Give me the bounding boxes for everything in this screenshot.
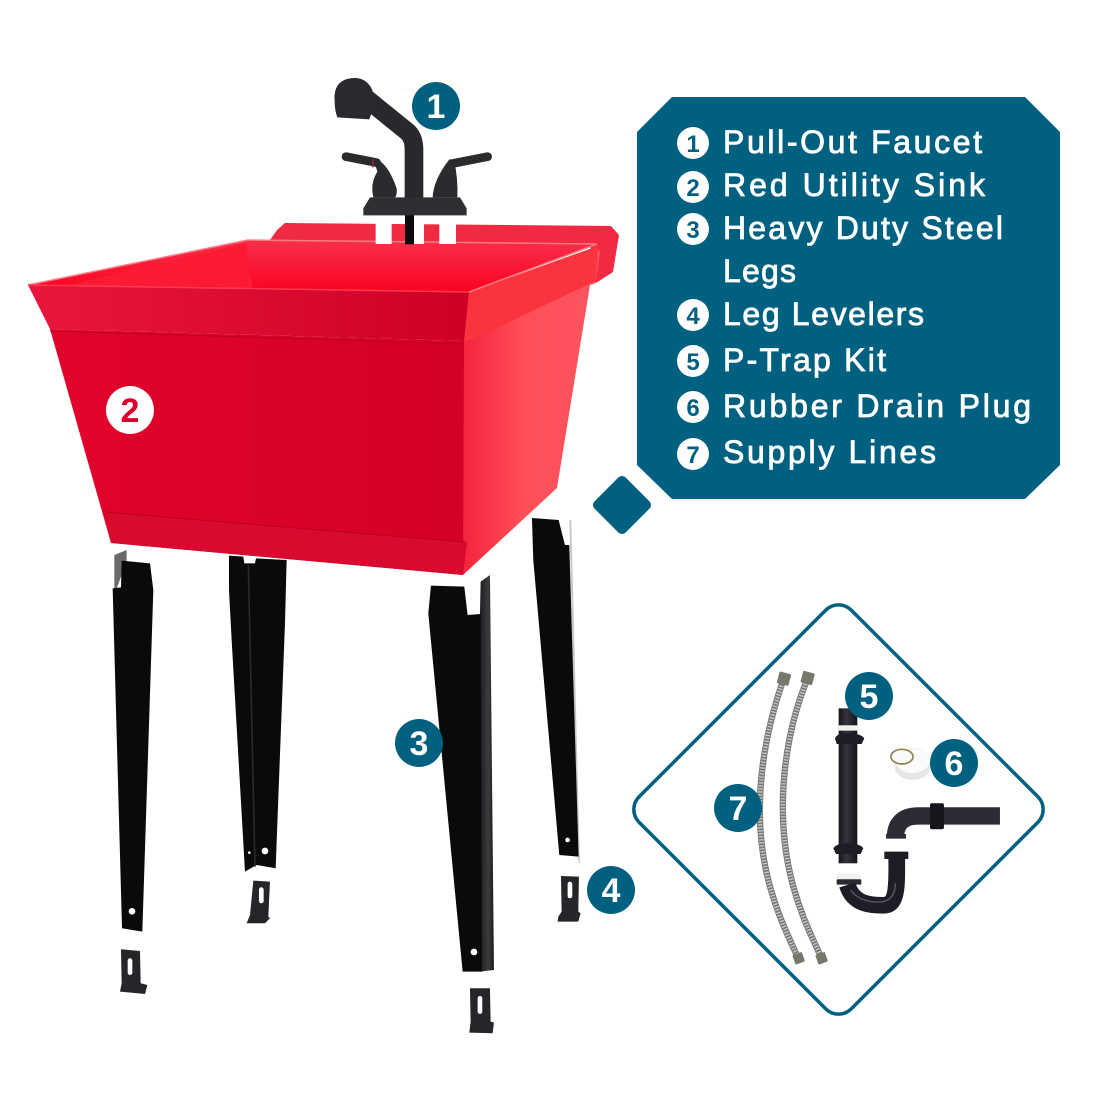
list item 2: 2 [686, 175, 700, 202]
callout 6: 6 [945, 745, 963, 783]
callout 2 [106, 386, 154, 434]
sink front rim [28, 285, 469, 341]
sink right side [462, 250, 600, 575]
panel: product sink [28, 223, 619, 575]
callout 7 [714, 784, 762, 832]
callout 6 [930, 739, 978, 787]
sink bottom band [106, 512, 467, 575]
sink right rim [464, 246, 598, 341]
list item 6: 6 [686, 395, 700, 422]
callout 5: 5 [860, 678, 878, 716]
list item 6: Rubber Drain Plug [723, 388, 1031, 424]
list item 4: 4 [686, 303, 700, 330]
list item 3: Heavy Duty Steel [723, 210, 1003, 246]
callout 1: 1 [427, 88, 445, 126]
panel: steel legs and levelers [113, 518, 581, 1033]
callout 2: 2 [121, 392, 139, 430]
icon: rubber drain plug [891, 748, 931, 780]
list item 3 [677, 210, 1003, 289]
list item 1: 1 [686, 131, 700, 158]
list item 4: Leg Levelers [723, 296, 924, 332]
callout 4 [587, 866, 635, 914]
icon: supply lines [760, 671, 828, 965]
list item 2: Red Utility Sink [723, 167, 986, 203]
panel: accessories diamond [626, 597, 1051, 1022]
leg 2 [229, 556, 287, 872]
icon: pull-out faucet [335, 78, 488, 244]
sink front body [50, 329, 464, 575]
callout 1 [412, 82, 460, 130]
list item 7: 7 [686, 442, 700, 469]
leg 4 [532, 518, 580, 865]
leveler 3 [469, 988, 494, 1033]
icon: p-trap kit [833, 708, 1000, 905]
callout 4: 4 [602, 872, 621, 910]
leg 3 [428, 575, 494, 972]
list item 7: Supply Lines [723, 434, 936, 470]
callout 3 [395, 719, 443, 767]
list item 5: P-Trap Kit [723, 342, 886, 378]
interior left wall [60, 243, 253, 289]
panel: parts list [637, 97, 1060, 499]
callout 5 [845, 672, 893, 720]
list item 5: 5 [686, 349, 700, 376]
callout 3: 3 [410, 725, 428, 763]
callout 7: 7 [729, 790, 747, 828]
leg 1 [113, 550, 153, 932]
decorative small diamond [591, 474, 653, 536]
parts list background [637, 97, 1060, 499]
leveler 1 [120, 949, 147, 994]
sink interior [28, 240, 597, 292]
back deck of sink [270, 223, 619, 283]
list item 3: Legs [723, 253, 796, 289]
list item 3: 3 [686, 217, 700, 244]
list item 1: Pull-Out Faucet [723, 124, 982, 160]
diamond outline [626, 597, 1051, 1022]
leveler 4 [558, 876, 581, 922]
leveler 2 [247, 881, 270, 923]
